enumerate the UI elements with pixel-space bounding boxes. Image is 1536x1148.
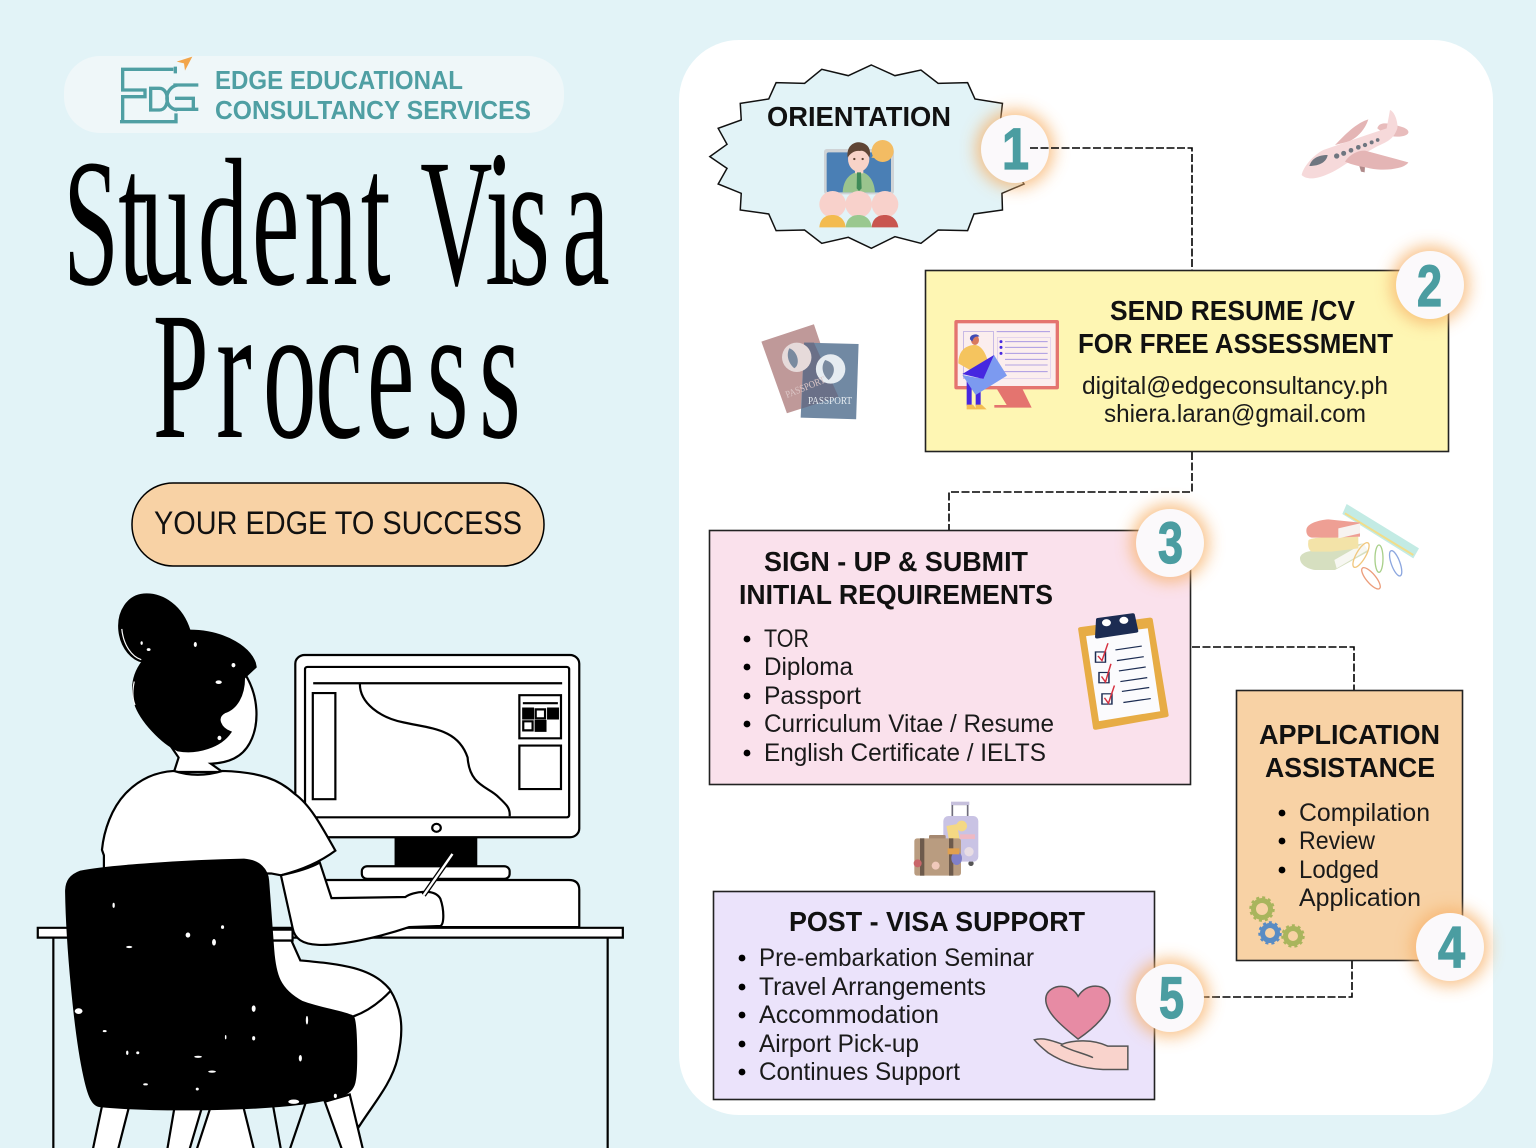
chair and hair specks	[75, 641, 337, 1104]
title: V	[420, 122, 492, 324]
chair legs	[91, 1094, 365, 1148]
icon: books and stationery	[1300, 504, 1419, 592]
title: S	[63, 122, 119, 324]
heading: APPLICATION	[1259, 719, 1440, 750]
support list: Continues Support	[759, 1058, 960, 1086]
badge: number 1: 1	[1002, 117, 1029, 182]
support list	[739, 944, 1034, 1086]
contact emails	[1082, 372, 1388, 428]
badge: number 5: 5	[1159, 966, 1184, 1031]
assistance list: Application	[1299, 884, 1421, 912]
panel: process flow	[679, 40, 1493, 1115]
heading	[1259, 719, 1440, 783]
heading: ASSISTANCE	[1265, 752, 1435, 783]
icon: person with envelope and monitor	[954, 320, 1059, 409]
heading	[1078, 295, 1393, 359]
title: tu	[118, 112, 193, 327]
title	[63, 112, 610, 480]
requirements list: English Certificate / IELTS	[764, 739, 1046, 767]
contact emails: shiera.laran@gmail.com	[1104, 400, 1366, 428]
icon: EDGE logo mark	[120, 57, 198, 122]
support list: Accommodation	[759, 1001, 939, 1029]
title: isa	[485, 112, 610, 327]
logo text: CONSULTANCY SERVICES	[215, 95, 531, 125]
icon: passports: PASSPORT	[808, 396, 852, 407]
assistance list: Lodged	[1299, 856, 1379, 884]
requirements list: Diploma	[764, 653, 853, 681]
computer monitor	[295, 655, 579, 927]
badge: number 2: 2	[1417, 254, 1442, 319]
icon: presenter and audience	[819, 140, 898, 227]
badge: number 5	[1131, 959, 1209, 1037]
dashed connector: step 2 to 3	[949, 452, 1192, 530]
pen	[424, 854, 452, 895]
icon: passports	[761, 324, 859, 419]
title: P	[153, 275, 209, 477]
assistance list: Compilation	[1299, 799, 1430, 827]
icon: passports: PASSPORT	[784, 375, 827, 401]
requirements list: Passport	[764, 682, 861, 710]
logo text	[215, 65, 531, 125]
badge: number 1	[976, 110, 1054, 188]
badge: number 4	[1411, 908, 1489, 986]
illustration: student at desk with computer	[38, 594, 623, 1148]
icon: luggage	[914, 802, 978, 876]
tagline pill: YOUR EDGE TO SUCCESS	[154, 505, 522, 541]
step 4 box: application assistance	[1236, 690, 1462, 960]
logo text: EDGE EDUCATIONAL	[215, 65, 463, 95]
support list: Airport Pick-up	[759, 1030, 919, 1058]
step 2 box: send resume	[926, 270, 1448, 452]
icon: airplane	[1302, 110, 1408, 178]
person body	[102, 672, 443, 1127]
support list: Travel Arrangements	[759, 973, 986, 1001]
heading	[739, 546, 1053, 610]
dashed connector: step 1 to 2	[1030, 148, 1192, 270]
requirements list: Curriculum Vitae / Resume	[764, 710, 1054, 738]
desk	[38, 928, 623, 1148]
title: ent	[252, 112, 391, 327]
badge: number 3: 3	[1158, 511, 1183, 576]
step 3 box: sign-up	[710, 530, 1190, 784]
hair	[119, 594, 256, 751]
heading: SIGN - UP & SUBMIT	[764, 546, 1028, 577]
contact emails: digital@edgeconsultancy.ph	[1082, 372, 1388, 400]
requirements list: TOR	[764, 625, 809, 653]
dashed connector: step 3 to 4	[1192, 647, 1354, 690]
heading: INITIAL REQUIREMENTS	[739, 579, 1053, 610]
chair back	[66, 860, 356, 1109]
icon: gears	[1250, 898, 1304, 946]
tagline pill	[132, 483, 544, 566]
heading: FOR FREE ASSESSMENT	[1078, 328, 1393, 359]
assistance list: Review	[1299, 827, 1376, 855]
requirements list	[744, 625, 1054, 767]
badge: number 2	[1391, 246, 1469, 324]
step 5 box: post-visa support	[714, 892, 1154, 1100]
support list: Pre-embarkation Seminar	[759, 944, 1034, 972]
icon: clipboard checklist	[1081, 615, 1166, 728]
logo banner	[64, 56, 564, 133]
assistance list	[1279, 799, 1430, 912]
title: rocess	[216, 265, 521, 480]
icon: heart in hand	[1034, 986, 1128, 1069]
step 1 orientation burst: ORIENTATION	[767, 101, 951, 132]
badge: number 4: 4	[1438, 915, 1465, 980]
step 1 orientation burst	[710, 65, 1033, 248]
heading: POST - VISA SUPPORT	[789, 906, 1085, 937]
title: d	[198, 122, 248, 324]
heading: SEND RESUME /CV	[1110, 295, 1355, 326]
badge: number 3	[1131, 504, 1209, 582]
dashed connector: step 4 to 5	[1200, 961, 1352, 997]
